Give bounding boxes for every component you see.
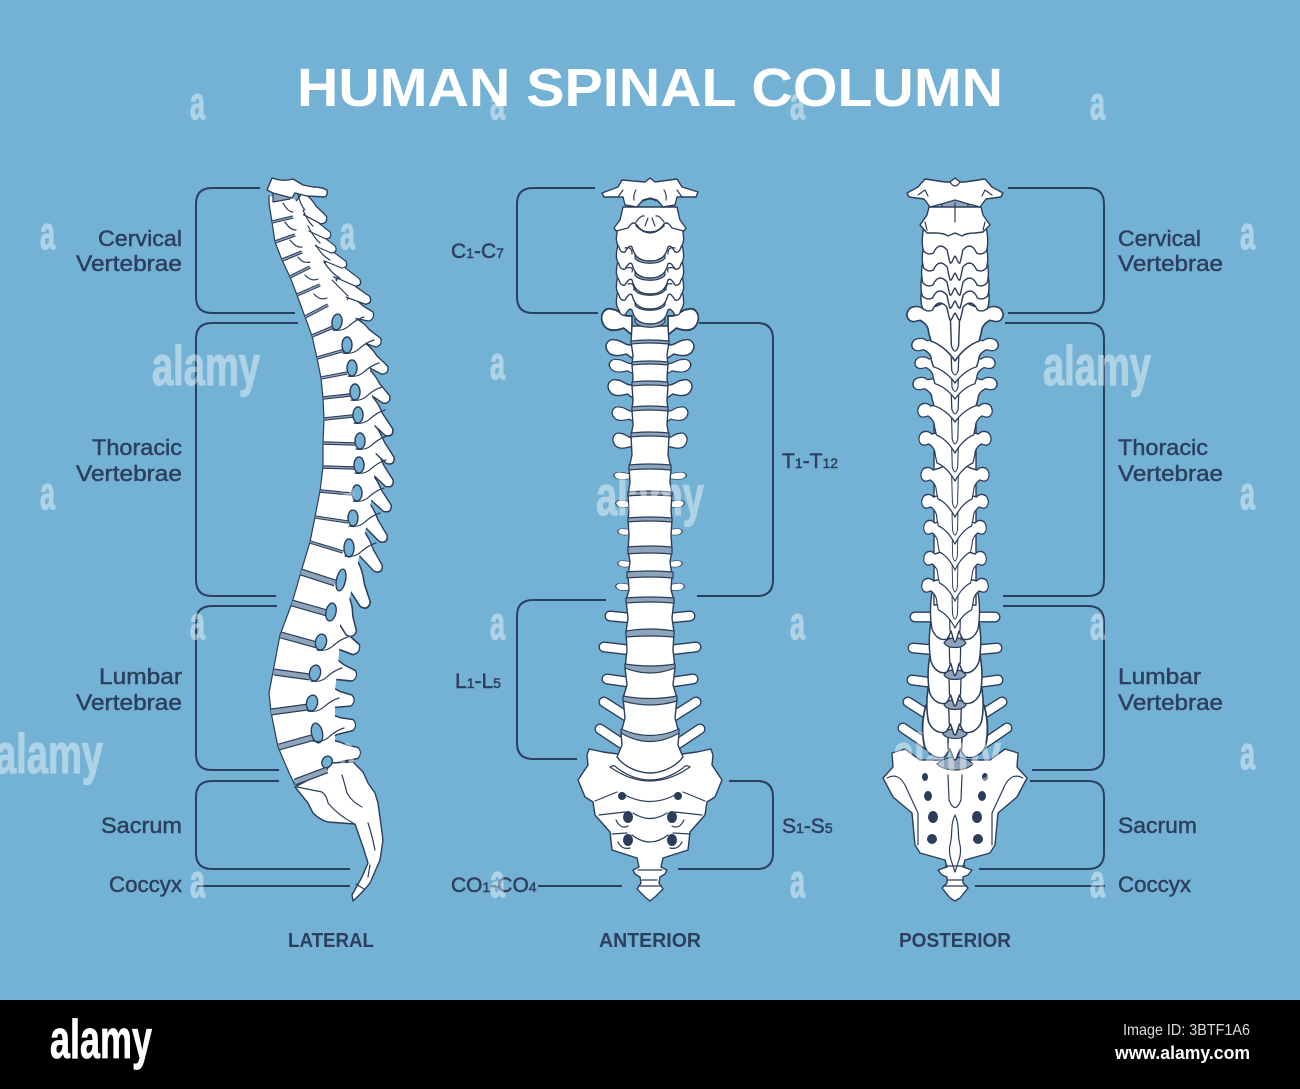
anterior vertebral column bbox=[617, 326, 683, 773]
left labels: Vertebrae bbox=[76, 461, 182, 486]
left labels bbox=[76, 226, 182, 897]
left labels: Sacrum bbox=[101, 813, 182, 838]
middle labels: CO1-CO4 bbox=[451, 874, 537, 897]
watermarks: a bbox=[1090, 597, 1105, 649]
view captions: ANTERIOR bbox=[599, 930, 702, 952]
lateral brackets bbox=[196, 188, 350, 886]
posterior cervical vertebrae bbox=[907, 178, 1003, 320]
lateral vertebral bodies bbox=[269, 196, 355, 782]
left labels: Thoracic bbox=[92, 435, 182, 460]
footer bar bbox=[0, 1000, 1300, 1089]
left labels: Cervical bbox=[98, 226, 182, 251]
image id: Image ID: 3BTF1A6 bbox=[1123, 1022, 1250, 1039]
watermarks: a bbox=[40, 207, 55, 259]
watermarks: a bbox=[490, 855, 505, 907]
right labels: Vertebrae bbox=[1118, 690, 1223, 715]
right labels: Sacrum bbox=[1118, 813, 1197, 838]
left labels: Lumbar bbox=[99, 664, 182, 689]
lateral foramina bbox=[305, 313, 365, 770]
posterior lumbar transverse processes bbox=[903, 617, 1007, 745]
lateral sacrum and coccyx bbox=[295, 762, 383, 901]
watermarks: alamy bbox=[152, 334, 260, 397]
watermarks: a bbox=[190, 77, 205, 129]
left labels: Coccyx bbox=[109, 872, 182, 897]
watermarks: a bbox=[190, 597, 205, 649]
right labels: Thoracic bbox=[1118, 435, 1208, 460]
lateral anterior edge bbox=[269, 196, 324, 785]
footer logo: alamy bbox=[50, 1008, 152, 1070]
right labels: Vertebrae bbox=[1118, 251, 1223, 276]
lateral view spine bbox=[267, 178, 400, 901]
left labels: Vertebrae bbox=[76, 251, 182, 276]
watermarks: a bbox=[1090, 77, 1105, 129]
left labels: Vertebrae bbox=[76, 690, 182, 715]
anterior cervical vertebrae bbox=[602, 178, 698, 327]
lateral intervertebral discs bbox=[271, 217, 355, 782]
view captions bbox=[288, 930, 1012, 952]
watermarks: a bbox=[40, 467, 55, 519]
anterior sacrum and coccyx bbox=[578, 749, 722, 901]
watermarks: a bbox=[490, 77, 505, 129]
watermarks: alamy bbox=[596, 464, 704, 527]
watermarks: a bbox=[790, 597, 805, 649]
lateral spinous processes bbox=[291, 192, 400, 765]
view captions: POSTERIOR bbox=[899, 930, 1012, 952]
watermarks: a bbox=[490, 597, 505, 649]
watermarks: a bbox=[1090, 855, 1105, 907]
website: www.alamy.com bbox=[1114, 1043, 1250, 1063]
lateral laminae details bbox=[283, 190, 387, 741]
posterior view spine bbox=[883, 178, 1027, 901]
anterior brackets bbox=[517, 188, 773, 886]
watermarks: a bbox=[490, 337, 505, 389]
watermarks: a bbox=[790, 855, 805, 907]
middle labels: T1-T12 bbox=[782, 450, 838, 473]
watermarks: a bbox=[790, 77, 805, 129]
middle labels: L1-L5 bbox=[455, 670, 501, 693]
anterior discs bbox=[621, 340, 679, 742]
middle labels bbox=[451, 240, 838, 897]
watermarks: a bbox=[340, 467, 355, 519]
anterior thoracic transverse processes bbox=[602, 309, 698, 592]
posterior lumbar vertebrae bbox=[923, 587, 987, 770]
watermarks: alamy bbox=[1043, 334, 1151, 397]
anterior lumbar transverse processes bbox=[600, 616, 700, 745]
posterior thoracic vertebrae bbox=[907, 302, 1003, 628]
watermarks: a bbox=[340, 207, 355, 259]
view captions: LATERAL bbox=[288, 930, 374, 952]
right labels: Lumbar bbox=[1118, 664, 1201, 689]
right labels: Vertebrae bbox=[1118, 461, 1223, 486]
posterior brackets bbox=[975, 188, 1105, 886]
lateral posterior mass bbox=[285, 195, 376, 785]
watermarks: alamy bbox=[893, 722, 1001, 785]
right labels: Cervical bbox=[1118, 226, 1201, 251]
posterior sacrum and coccyx bbox=[883, 749, 1027, 901]
right labels bbox=[1118, 226, 1223, 897]
watermarks: a bbox=[340, 727, 355, 779]
right labels: Coccyx bbox=[1118, 872, 1191, 897]
watermarks: a bbox=[190, 855, 205, 907]
title: HUMAN SPINAL COLUMN bbox=[297, 58, 1003, 118]
middle labels: S1-S5 bbox=[782, 815, 833, 838]
middle labels: C1-C7 bbox=[451, 240, 504, 263]
watermarks bbox=[0, 77, 1255, 907]
lateral atlas bbox=[267, 178, 327, 202]
posterior column behind thoracic vertebrae bbox=[934, 330, 976, 605]
watermarks: a bbox=[1240, 207, 1255, 259]
anterior sacral arc bbox=[610, 766, 690, 780]
watermarks: a bbox=[1240, 467, 1255, 519]
watermarks: a bbox=[1240, 727, 1255, 779]
anterior view spine bbox=[578, 178, 722, 901]
